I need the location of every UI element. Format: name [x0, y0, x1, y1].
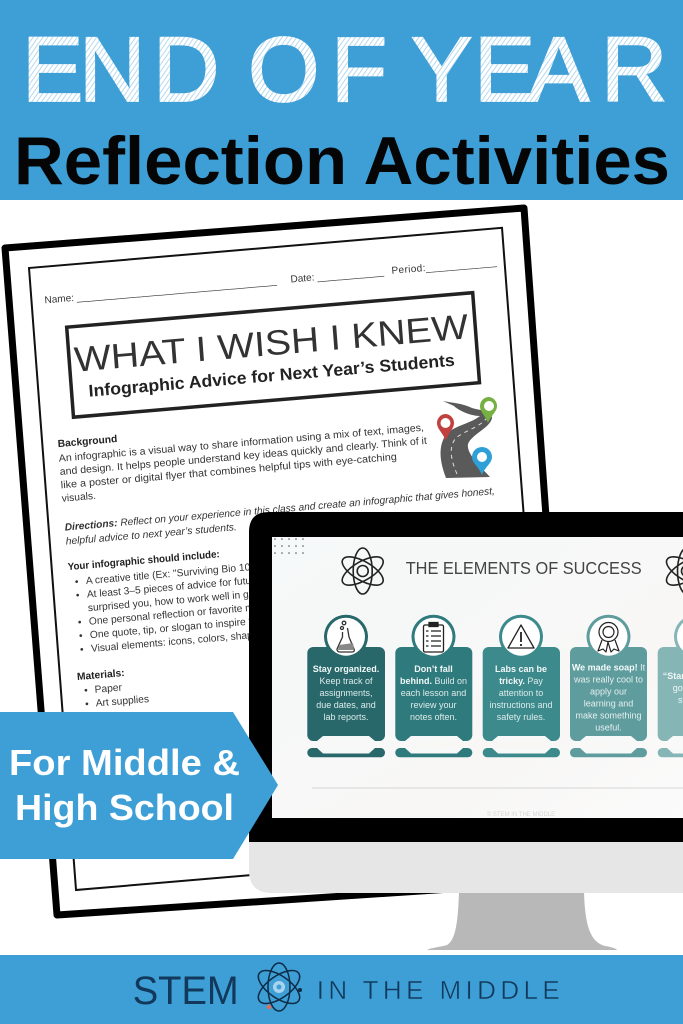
icon: award ribbon	[598, 622, 619, 652]
infographic requirements list: Your infographic should include:	[67, 549, 220, 573]
infographic requirements list: •	[78, 617, 82, 629]
infographic requirements list: •	[76, 590, 80, 602]
monitor chin	[249, 820, 683, 893]
footer logo band	[0, 955, 683, 1024]
materials list: Materials:	[77, 668, 125, 683]
title: End of Year: END OF YEAR	[22, 19, 667, 121]
green pin	[480, 397, 497, 423]
directions text: Directions: Reflect on your experience in this class and create an infographic that gives honest,	[64, 486, 495, 534]
card 2: don't fall behind: behind. Build on	[400, 676, 467, 686]
card 4: we made soap: apply our	[590, 686, 627, 696]
icon: clipboard checklist	[424, 622, 444, 652]
card 2: don't fall behind: each lesson and	[401, 688, 466, 698]
background text: and design. It helps people understand key ideas quickly and clearly. Think of it	[59, 436, 427, 478]
card 2: don't fall behind	[395, 615, 472, 757]
icon: atom right	[662, 548, 683, 594]
infographic requirements list: At least 3–5 pieces of advice for future students	[87, 571, 302, 601]
red pin	[437, 414, 454, 441]
materials list: Paper	[94, 683, 123, 696]
icon: flask	[337, 621, 354, 652]
computer monitor	[249, 512, 683, 893]
card 1: stay organized: due dates, and	[316, 700, 376, 710]
materials list: •	[85, 699, 90, 710]
name, date and period line: Name: ____________________________________	[44, 276, 277, 306]
materials list: Art supplies	[95, 694, 149, 710]
dotted decoration	[274, 538, 304, 554]
monitor stand	[427, 892, 617, 950]
logo words: in the middle: IN THE MIDDLE	[317, 975, 560, 1005]
name, date and period line: Period:____________	[391, 257, 497, 277]
logo word: STEM: STEM	[133, 969, 239, 1013]
infographic requirements list: Visual elements: icons, colors, shapes	[91, 629, 264, 655]
worksheet content	[29, 228, 549, 890]
card 3: labs can be tricky: instructions and	[489, 700, 553, 710]
card 4: we made soap: useful.	[595, 722, 622, 732]
worksheet title box	[67, 293, 479, 417]
background text: Background	[57, 434, 118, 450]
card 2: don't fall behind: Don’t fall	[414, 664, 453, 674]
card 3: labs can be tricky: Labs can be	[495, 664, 547, 674]
card 1: stay organized: assignments,	[319, 688, 373, 698]
infographic requirements list	[67, 542, 306, 656]
audience badge arrow	[0, 712, 278, 859]
card 1: stay organized	[307, 615, 385, 757]
card 4: we made soap: We made soap! It	[572, 662, 646, 672]
infographic requirements list: A creative title (Ex: "Surviving Bio 101")	[86, 561, 263, 587]
icon: atom left	[338, 548, 387, 594]
background text: An infographic is a visual way to share information using a mix of text, images,	[58, 423, 424, 465]
background text: visuals.	[61, 491, 96, 505]
background text: like a poster or digital flyer that combines helpful tips with eye-catching	[60, 452, 398, 491]
card 1: stay organized: Keep track of	[319, 676, 373, 686]
worksheet page	[5, 208, 572, 915]
infographic requirements list: •	[79, 631, 83, 642]
card 5: partly cropped	[658, 615, 683, 757]
directions text: helpful advice to next year’s students.	[65, 522, 237, 548]
infographic requirements list: •	[75, 577, 79, 588]
card 3: labs can be tricky: tricky. Pay	[499, 676, 543, 686]
audience badge arrow: For Middle &	[9, 742, 240, 783]
icon: warning triangle	[508, 625, 534, 648]
background text	[57, 408, 429, 505]
card 3: labs can be tricky: safety rules.	[497, 712, 545, 722]
card 4: we made soap: learning and	[584, 698, 633, 708]
blue pin	[472, 447, 492, 475]
infographic requirements list: surprised you, how to work well in groups)	[88, 587, 278, 614]
materials list	[77, 666, 149, 711]
name, date and period line	[44, 257, 497, 306]
monitor bezel	[249, 512, 683, 842]
slide heading: THE ELEMENTS OF SUCCESS	[406, 558, 642, 578]
icon: logo atom	[253, 963, 305, 1011]
card 4: we made soap	[570, 615, 647, 757]
infographic requirements list: One quote, tip, or slogan to inspire them	[90, 615, 272, 641]
icon: winding road with map pins	[437, 397, 497, 478]
materials list: •	[84, 685, 89, 697]
worksheet title box: WHAT I WISH I KNEW	[73, 307, 471, 380]
inner frame	[29, 228, 549, 890]
card 4: we made soap: make something	[575, 710, 642, 720]
subtitle: Reflection Activities: Reflection Activities	[14, 123, 670, 199]
card 2: don't fall behind: review your	[410, 700, 457, 710]
worksheet title box: Infographic Advice for Next Year’s Students	[88, 351, 455, 401]
card 2: don't fall behind: notes often.	[410, 712, 457, 722]
infographic requirements list: •	[80, 645, 84, 656]
card 1: stay organized: Stay organized.	[313, 664, 379, 674]
screen slide	[272, 537, 683, 818]
card 3: labs can be tricky: attention to	[499, 688, 543, 698]
slide copyright: © STEM IN THE MIDDLE	[487, 811, 555, 818]
name, date and period line: Date: ____________	[290, 267, 385, 285]
card 1: stay organized: lab reports.	[323, 712, 369, 722]
audience badge arrow: High School	[15, 787, 234, 828]
card 4: we made soap: was really cool to	[573, 674, 643, 684]
card 3: labs can be tricky	[483, 615, 560, 757]
header band	[0, 0, 683, 200]
infographic requirements list: One personal reflection or favorite memory	[89, 600, 283, 628]
worksheet outer frame	[5, 208, 572, 915]
